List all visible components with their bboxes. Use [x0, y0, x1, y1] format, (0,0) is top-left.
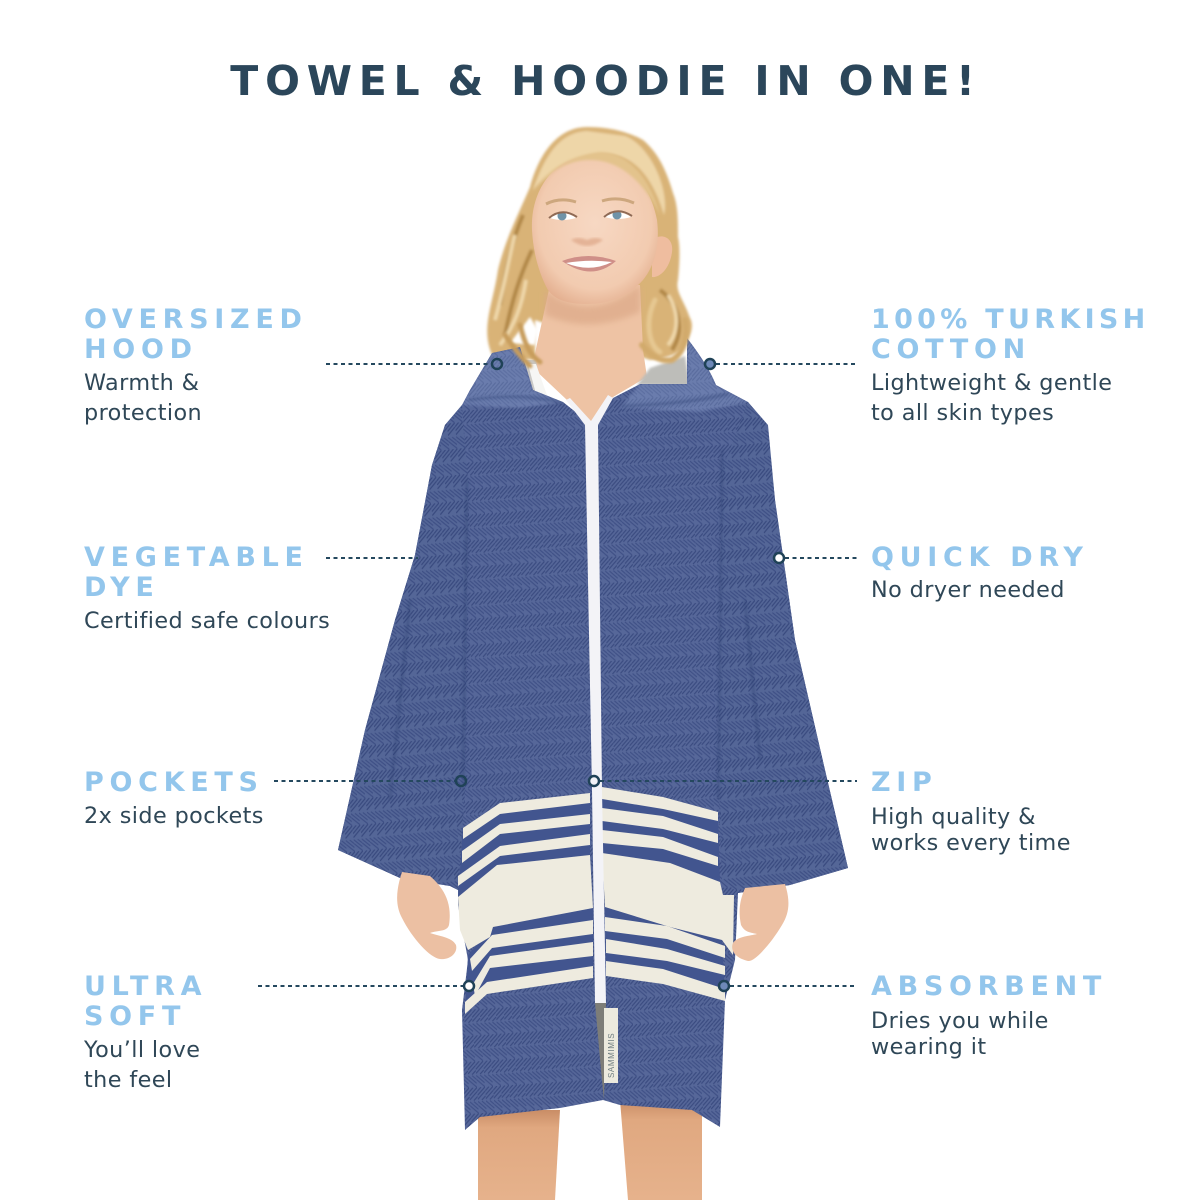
- callout: turkish cotton: [871, 304, 1150, 426]
- callout: oversized hood: OVERSIZED: [84, 304, 308, 335]
- callout: absorbent: ABSORBENT: [871, 971, 1107, 1002]
- callout: zip: ZIP: [871, 767, 938, 798]
- callout: zip: High quality &: [871, 804, 1036, 830]
- callout: quick dry: QUICK DRY: [871, 542, 1089, 573]
- hood and fold shading clipped to robe: [390, 338, 760, 800]
- callout: vegetable dye: [84, 542, 330, 634]
- callout: turkish cotton: 100% TURKISH: [871, 304, 1150, 335]
- callout: turkish cotton: to all skin types: [871, 400, 1054, 426]
- centre slit: [595, 1003, 606, 1100]
- callout lines: [258, 364, 857, 986]
- hood lining: [493, 356, 690, 398]
- callout: oversized hood: [84, 304, 308, 426]
- callout: quick dry: [871, 542, 1089, 603]
- callout: turkish cotton: Lightweight & gentle: [871, 370, 1112, 396]
- callout: quick dry: No dryer needed: [871, 577, 1065, 603]
- fringe strands over forehead: [530, 152, 660, 215]
- callout: vegetable dye: Certified safe colours: [84, 608, 330, 634]
- zip: [566, 395, 613, 1003]
- label tag: SAMMIMIS: [607, 1033, 616, 1078]
- illustration: child wearing hooded towel robe with callout lines: [258, 125, 857, 1200]
- eyebrows: [546, 199, 634, 204]
- callout: ultra soft: You’ll love: [84, 1036, 200, 1062]
- label tag: [604, 1008, 618, 1083]
- callout: ultra soft: the feel: [84, 1067, 173, 1093]
- eyes: [549, 210, 632, 220]
- callout: oversized hood: protection: [84, 400, 202, 426]
- callout markers: [456, 359, 784, 991]
- callout: pockets: [84, 767, 264, 828]
- callout: vegetable dye: DYE: [84, 572, 160, 603]
- callout: vegetable dye: VEGETABLE: [84, 542, 309, 573]
- callout: oversized hood: Warmth &: [84, 370, 200, 396]
- robe silhouette: [338, 338, 848, 1130]
- nose: [571, 238, 603, 246]
- hair: [487, 127, 692, 360]
- callout: ultra soft: [84, 971, 207, 1093]
- chin shadow: [545, 285, 640, 324]
- left hand: [397, 872, 456, 959]
- callout: pockets: 2x side pockets: [84, 802, 264, 828]
- callout: absorbent: Dries you while: [871, 1008, 1049, 1034]
- blue stripe base: [458, 787, 725, 1013]
- callout: pockets: POCKETS: [84, 767, 264, 798]
- hair locks over the hood: [505, 300, 686, 366]
- right hand: [732, 884, 788, 961]
- callout: ultra soft: SOFT: [84, 1001, 186, 1032]
- callout: zip: [871, 767, 1071, 856]
- title: TOWEL & HOODIE IN ONE!: [230, 57, 982, 105]
- gap between hair and neck: [510, 317, 538, 345]
- ear: [652, 236, 672, 277]
- neck: [532, 285, 647, 424]
- smile: [562, 256, 616, 272]
- callout: zip: works every time: [871, 830, 1071, 856]
- legs: [478, 1100, 702, 1200]
- callout: ultra soft: ULTRA: [84, 971, 207, 1002]
- callout: absorbent: [871, 971, 1107, 1060]
- callout: oversized hood: HOOD: [84, 334, 198, 365]
- cream stripes: [458, 787, 734, 1014]
- callout: absorbent: wearing it: [871, 1034, 986, 1060]
- sleeves: [338, 402, 848, 893]
- callout: turkish cotton: COTTON: [871, 334, 1031, 365]
- face: [532, 157, 658, 304]
